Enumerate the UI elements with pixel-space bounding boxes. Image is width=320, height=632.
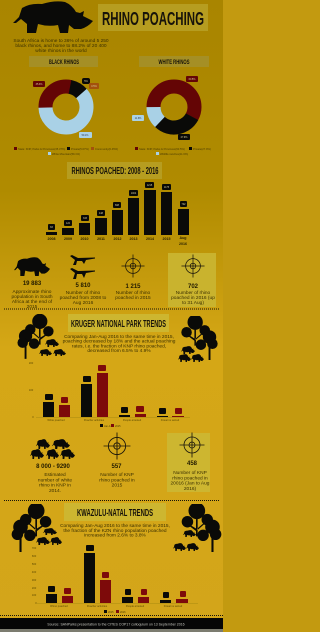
stat: rhino population: Africa at the end of [12, 299, 53, 305]
stat: rhinos poached 2008 to 2016: 5 810 [75, 283, 91, 289]
bar chart: rhinos poached by year: 668 [115, 204, 120, 207]
stat: rhinos poached in 2015: Number of rhino [116, 290, 151, 296]
bar chart: KwaZulu-Natal trends: 2016 [120, 611, 126, 614]
legend: white rhinos: Wildlife ranches(11.6%) [160, 152, 188, 156]
legend: black rhinos: State: KNP, Parks & Provinces(35.37%) [18, 147, 65, 151]
bar chart: rhinos poached by year: 2014 [146, 237, 154, 241]
panel: KNP rhino poached 2016 [167, 432, 210, 492]
icon: trees and rhinos right [173, 502, 221, 552]
legend: white rhinos [135, 147, 211, 156]
stat: rhino population: population in South [11, 294, 53, 300]
stat: white rhino in KNP: number of white [38, 477, 72, 483]
bar chart: KwaZulu-Natal trends: 2015 [108, 611, 114, 614]
bar chart: Kruger trends: 2015 [115, 425, 121, 428]
Kruger text: decreased from 6.5% to 4.9% [87, 348, 151, 354]
donut chart: white rhinos: 27.9% [181, 136, 188, 139]
bar chart: KwaZulu-Natal trends: People arrested [126, 604, 145, 608]
heading: rhinos poached: RHINOS POACHED: 2008 - 2016 [72, 166, 159, 177]
bar chart: KwaZulu-Natal trends: Poacher activities [87, 604, 108, 608]
stat: KNP rhino poached 2015: Number of KNP [100, 472, 134, 478]
heading: KwaZulu-Natal: KWAZULU-NATAL TRENDS [77, 508, 153, 519]
bar chart: Kruger trends: People arrested [123, 418, 142, 422]
bar chart: rhinos poached by year: 1215 [147, 184, 153, 187]
bar chart: rhinos poached by year: 83 [50, 226, 53, 229]
KwaZulu-Natal text: increased from 2.6% to 3.8% [84, 533, 147, 539]
heading: white rhinos [139, 56, 209, 67]
donut chart: white rhinos: 60.5% [189, 78, 196, 81]
title [98, 4, 208, 31]
panel: rhinos poached in 2016: 702 [188, 284, 199, 290]
bar chart: Kruger trends: Poacher activities [84, 418, 105, 422]
stat: KNP rhino poached 2015: 557 [111, 464, 122, 470]
bar chart: KwaZulu-Natal trends: 200 [32, 586, 37, 590]
panel: KNP rhino poached 2016: 458 [187, 461, 198, 467]
stat: white rhino in KNP: Estimated [44, 472, 66, 478]
stat: rhinos poached 2008 to 2016: Number of rhino [66, 290, 101, 296]
stat: white rhino in KNP: 8 000 - 9290 [36, 464, 71, 470]
stat: rhinos poached in 2015: 1 215 [125, 284, 141, 290]
Kruger text: Comparing Jan-Aug 2016 to the same time in 2015, [64, 334, 174, 340]
bar chart: KwaZulu-Natal trends: 100 [32, 593, 37, 597]
bar chart: KwaZulu-Natal trends: 500 [32, 562, 37, 566]
bar chart: KwaZulu-Natal trends: 600 [32, 554, 37, 558]
bar chart: rhinos poached by year: 333 [83, 217, 88, 220]
stat: rhino population [11, 257, 53, 310]
stat: rhinos poached 2008 to 2016: Aug 2016 [73, 300, 94, 306]
heading: KwaZulu-Natal [64, 503, 166, 521]
bar chart: rhinos poached by year: 2010 [80, 237, 88, 241]
stat: rhino population: 19 883 [23, 281, 42, 287]
stat: rhino population: 2015 [27, 304, 38, 310]
bar chart: Kruger trends: Firearms seized [161, 418, 180, 422]
icon: trees and rhinos right [178, 315, 218, 362]
bar chart: rhinos poached by year: 2012 [114, 237, 122, 241]
legend: black rhinos: Community(0.45%) [95, 147, 118, 151]
bar chart: rhinos poached by year: 2009 [64, 237, 72, 241]
bar chart: KwaZulu-Natal trends: 400 [32, 570, 37, 574]
panel: rhinos poached in 2016 [168, 253, 216, 307]
panel: rhinos poached in 2016: Number of rhino [176, 290, 211, 296]
KwaZulu-Natal text: the fraction of the KZN rhino population poached [63, 528, 167, 534]
panel: KNP rhino poached 2016: 20016 (Jan to Aug [171, 481, 210, 487]
donut chart: white rhinos: 11.6% [135, 117, 142, 120]
bar chart: rhinos poached by year: 2015 [162, 237, 170, 241]
bar chart: KwaZulu-Natal trends: Firearms seized [164, 604, 183, 608]
intro text: black rhinos, and home to 88.2% of 20 400 [15, 43, 107, 49]
stat: rhinos poached 2008 to 2016 [60, 255, 107, 306]
stat: rhinos poached in 2015 [115, 254, 151, 301]
bar chart: rhinos poached by year: 2008 [48, 237, 56, 241]
bar chart: rhinos poached by year: 1004 [131, 192, 137, 195]
panel: KNP rhino poached 2016: Number of KNP [173, 470, 207, 476]
bar chart: KwaZulu-Natal trends: Rhino poached [50, 604, 68, 608]
stat: rhinos poached in 2015: poached in 2015 [115, 295, 151, 301]
donut chart: white rhinos [132, 76, 203, 140]
bar chart: Kruger trends: Jan-A [104, 425, 111, 428]
heading: black rhinos: BLACK RHINOS [49, 59, 79, 66]
donut chart: black rhinos [33, 78, 99, 138]
bar chart: rhinos poached by year: 448 [99, 212, 104, 215]
heading: white rhinos: WHITE RHINOS [158, 59, 190, 66]
intro text: South Africa is home to 36% of around 5 250 [13, 38, 109, 44]
legend: black rhinos [14, 147, 118, 156]
heading: Kruger [68, 314, 169, 332]
bar chart: Kruger trends: 200 [29, 361, 34, 365]
stat: rhino population: Approximate rhino [13, 289, 52, 295]
background [0, 0, 223, 632]
legend: white rhinos: Private(27.9%) [193, 147, 211, 151]
bar chart: KwaZulu-Natal trends: 0 [35, 601, 37, 605]
bar chart: KwaZulu-Natal trends: 700 [32, 546, 37, 550]
icon: trees and rhinos left [12, 502, 62, 552]
panel: rhinos poached in 2016: poached in 2016 (up [171, 295, 215, 301]
stat: KNP rhino poached 2015: 2015 [112, 483, 123, 489]
Kruger text: rates, i.e. the fraction of KNP rhino poached, [72, 343, 166, 349]
donut chart: black rhinos: 59.1% [82, 134, 89, 137]
legend: white rhinos: State: KNP, Parks & Provinces(60.5%) [139, 147, 185, 151]
heading: black rhinos [29, 56, 98, 67]
footer: source [0, 618, 223, 629]
bar chart: Kruger trends: 100 [29, 388, 34, 392]
bar chart: Kruger trends [29, 361, 190, 428]
bar chart: rhinos poached by year: 122 [66, 222, 71, 225]
Kruger text: poaching decreased by 18% and the actual poaching [63, 339, 176, 345]
panel: rhinos poached in 2016: to 31 Aug) [182, 300, 204, 306]
heading: rhinos poached [67, 162, 162, 179]
bar chart: KwaZulu-Natal trends [32, 545, 198, 614]
intro text: white rhinos in the world [35, 48, 87, 54]
stat: KNP rhino poached 2015 [99, 433, 135, 489]
stat: white rhino in KNP [30, 439, 75, 494]
bar chart: Kruger trends: White poached [47, 418, 65, 422]
icon: trees and rhinos left [17, 314, 66, 359]
donut chart: black rhinos: 35.3% [36, 83, 43, 86]
stat: white rhino in KNP: rhino in KNP in [39, 483, 71, 489]
legend: black rhinos: White Mountain(59.1%) [52, 152, 80, 156]
stat: rhinos poached 2008 to 2016: poached from 2008 to [60, 295, 107, 301]
footer: source: Source: SANParks presentation to the CITES COP17 colloquium on 13 September 2016 [47, 622, 185, 626]
donut chart: black rhinos: 5% [84, 80, 89, 83]
panel: KNP rhino poached 2016: 2016) [184, 486, 197, 492]
icon: rhino silhouette [13, 1, 93, 33]
stat: white rhino in KNP: 2014. [49, 488, 61, 494]
bar chart: KwaZulu-Natal trends: 300 [32, 578, 37, 582]
bar chart: rhinos poached by year: 702 [182, 203, 186, 206]
bar chart: rhinos poached by year: 1175 [164, 186, 170, 189]
bar chart: rhinos poached by year: 2013 [130, 237, 138, 241]
stat: KNP rhino poached 2015: rhino poached in [99, 477, 135, 483]
bar chart: rhinos poached by year: Aug [180, 236, 186, 240]
donut chart: black rhinos: 0.5% [91, 85, 98, 88]
KwaZulu-Natal text: Comparing Jan-Aug 2016 to the same time in 2015, [60, 523, 170, 529]
bar chart: Kruger trends: 0 [32, 415, 34, 419]
bar chart: rhinos poached by year [46, 182, 189, 246]
legend: black rhinos: Private(5.07%) [71, 147, 89, 151]
panel: KNP rhino poached 2016: rhino poached in [172, 475, 208, 481]
bar chart: rhinos poached by year: 2011 [97, 237, 105, 241]
bar chart: rhinos poached by year: 2016 [179, 242, 187, 246]
